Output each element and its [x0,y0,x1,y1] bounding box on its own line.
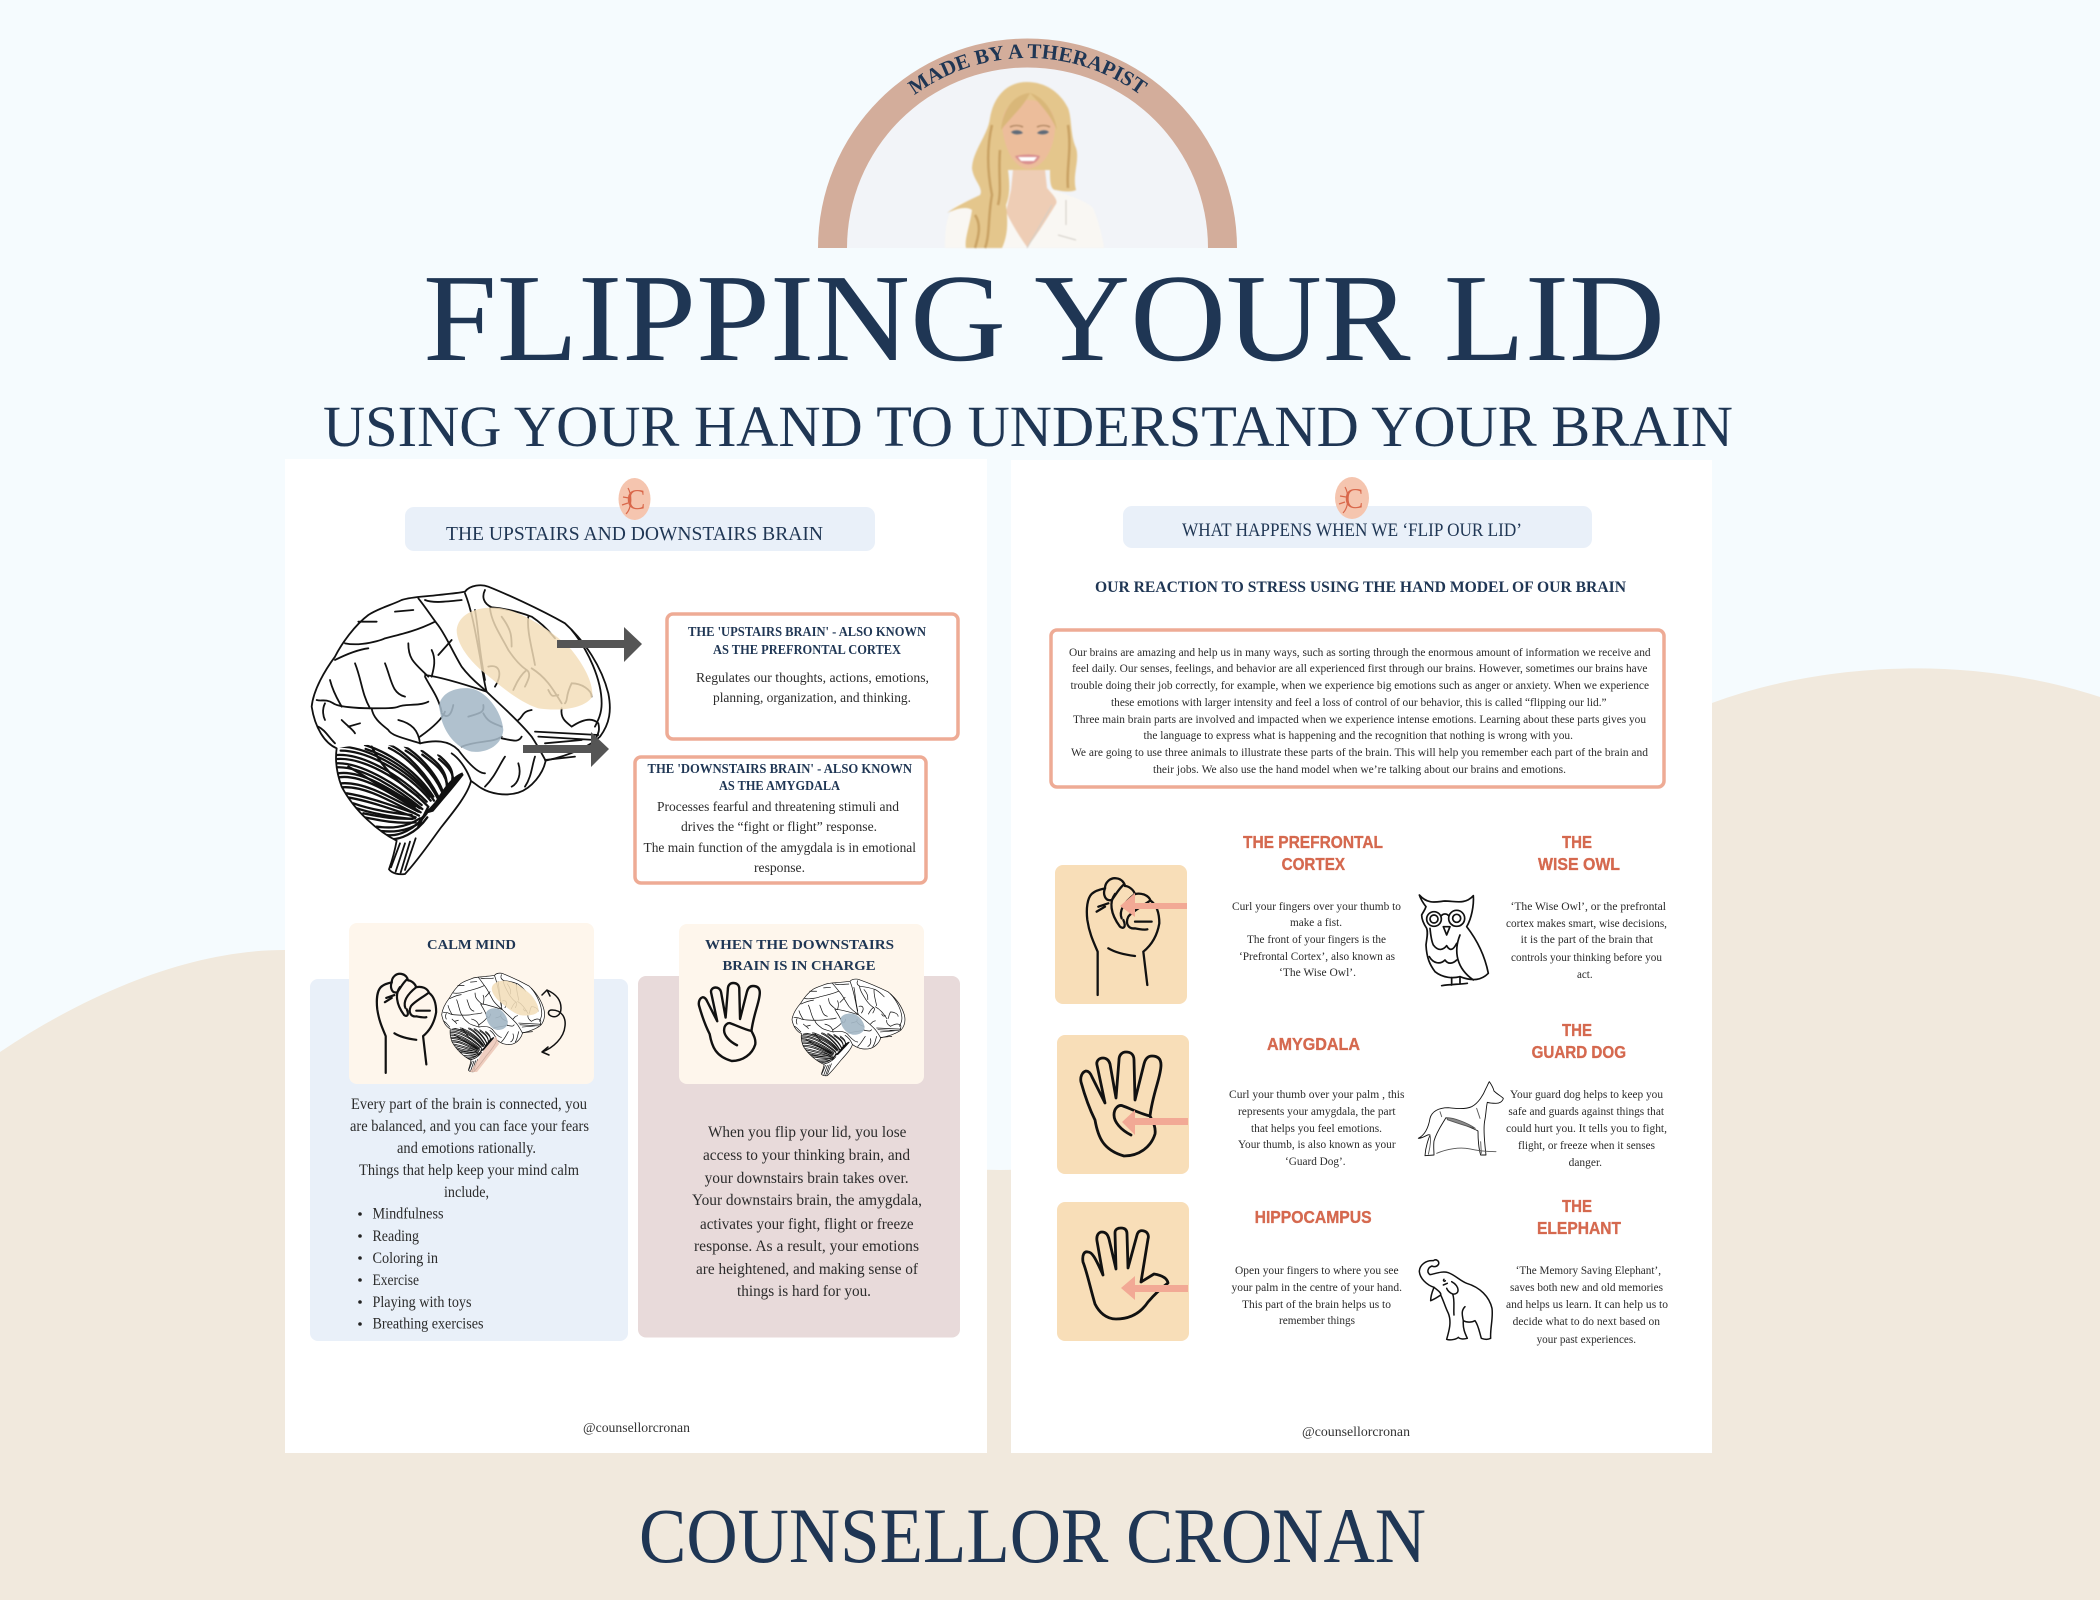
callout: upstairs brain: Regulates our thoughts, actions, emotions, [696,671,929,686]
tile: fist hand model [1055,865,1187,1004]
arch text: MADE BY A THERAPIST [907,44,1148,95]
list: calming activities: Exercise [372,1272,419,1289]
section: wise owl: controls your thinking before you [1511,952,1662,964]
text: calm mind description: include, [444,1184,489,1201]
section: amygdala: ‘Guard Dog’. [1285,1156,1346,1168]
tile: open palm hand model [1057,1202,1189,1341]
section: guard dog: Your guard dog helps to keep you [1510,1089,1663,1101]
panel: upstairs and downstairs brain [285,459,987,1453]
arrow: to downstairs brain [523,732,609,767]
callout: introduction: We are going to use three animals to illustrate these parts of the brain. This will help you remember each part of the brain and [1071,747,1648,759]
text: downstairs brain description: your downstairs brain takes over. [705,1170,909,1187]
text: calm mind description: Every part of the brain is connected, you [351,1096,587,1113]
text: calm mind description: are balanced, and you can face your fears [350,1118,589,1135]
icon: fist [377,974,436,1073]
callout: introduction: these emotions with larger intensity and feel a loss of control of our behavior, this is called “flipping our lid.” [1111,697,1607,709]
heading pill: THE UPSTAIRS AND DOWNSTAIRS BRAIN [446,523,823,545]
list: calming activities: Mindfulness [372,1206,444,1223]
callout: introduction: their jobs. We also use the hand model when we’re talking about our brains and emotions. [1153,764,1566,776]
card: downstairs brain in charge: WHEN THE DOWNSTAIRS [705,937,894,952]
section: hippocampus: HIPPOCAMPUS [1255,1207,1372,1227]
text: downstairs brain description: response. As a result, your emotions [694,1238,919,1255]
icon: hand with curled thumb [699,983,760,1061]
section: prefrontal cortex: CORTEX [1282,854,1345,874]
card: calm mind: CALM MIND [427,937,516,952]
logo badge: C [627,485,645,516]
section: wise owl [1419,832,1667,986]
section: amygdala: that helps you feel emotions. [1251,1123,1382,1135]
heading pill [405,507,875,551]
text: downstairs brain description: activates your fight, flight or freeze [700,1216,914,1233]
card: calm mind [310,923,628,1341]
card: downstairs brain in charge [638,924,960,1338]
icon: dog [1418,1082,1503,1156]
section: prefrontal cortex: make a fist. [1290,917,1342,929]
text: downstairs brain description: When you flip your lid, you lose [708,1124,907,1141]
text: calm mind description [350,1096,589,1201]
callout: upstairs brain [667,614,958,739]
callout: downstairs brain: drives the “fight or flight” response. [681,820,877,835]
section: guard dog [1418,1020,1667,1169]
handle: @counsellorcronan [1302,1425,1410,1440]
section: amygdala: Your thumb, is also known as your [1238,1139,1396,1151]
section: amygdala: Curl your thumb over your palm , this [1229,1089,1405,1101]
section: prefrontal cortex: ‘The Wise Owl’. [1279,967,1356,979]
logo badge [618,478,650,520]
section: hippocampus [1232,1207,1402,1327]
section: guard dog: safe and guards against things that [1508,1106,1665,1118]
brain diagram [312,585,610,874]
section: elephant: THE [1562,1196,1592,1216]
tile: curled thumb hand model [1057,1035,1189,1174]
callout: upstairs brain: THE 'UPSTAIRS BRAIN' - ALSO KNOWN [688,624,926,639]
callout: introduction [1051,630,1664,787]
icon: calm brain [442,973,545,1072]
text: calm mind description: and emotions rationally. [397,1140,536,1157]
icon: flipped brain [792,979,905,1076]
title: FLIPPING YOUR LID [423,250,1665,388]
subtitle: USING YOUR HAND TO UNDERSTAND YOUR BRAIN [323,394,1733,459]
logo badge [1335,477,1369,519]
handle: @counsellorcronan [583,1421,690,1436]
section: guard dog: GUARD DOG [1532,1042,1626,1062]
section: wise owl: WISE OWL [1538,854,1620,874]
section: amygdala [1229,1034,1405,1168]
callout: downstairs brain: AS THE AMYGDALA [719,778,840,793]
panel: what happens when we flip our lid [1011,460,1712,1453]
callout: introduction: feel daily. Our senses, feelings, and behavior are all experienced first through our brains. However, sometimes our brains have [1072,663,1648,675]
subheading: OUR REACTION TO STRESS USING THE HAND MODEL OF OUR BRAIN [1095,579,1626,596]
text: downstairs brain description [692,1124,922,1300]
section: elephant: ELEPHANT [1537,1218,1621,1238]
arrow: to upstairs brain [557,627,642,662]
section: elephant: and helps us learn. It can help us to [1506,1299,1668,1311]
callout: downstairs brain: The main function of the amygdala is in emotional [644,841,916,856]
heading pill [1123,506,1592,548]
text: downstairs brain description: things is hard for you. [737,1283,871,1300]
section: hippocampus: your palm in the centre of your hand. [1232,1282,1402,1294]
section: prefrontal cortex: THE PREFRONTAL [1243,832,1383,852]
text: downstairs brain description: are heightened, and making sense of [696,1261,919,1278]
section: wise owl: cortex makes smart, wise decisions, [1506,918,1667,930]
icon: elephant [1419,1260,1492,1340]
section: wise owl: it is the part of the brain that [1521,934,1654,946]
section: wise owl: ‘The Wise Owl’, or the prefrontal [1510,901,1666,913]
section: amygdala: represents your amygdala, the part [1238,1106,1396,1118]
icon: owl [1419,895,1488,986]
text: downstairs brain description: Your downstairs brain, the amygdala, [692,1192,922,1209]
section: elephant: saves both new and old memories [1510,1282,1664,1294]
section: hippocampus: Open your fingers to where you see [1235,1265,1399,1277]
callout: downstairs brain [635,757,926,883]
icon: circular arrows [542,990,565,1055]
section: guard dog: flight, or freeze when it senses [1518,1140,1656,1152]
section: guard dog: could hurt you. It tells you to fight, [1506,1123,1667,1135]
section: guard dog: THE [1562,1020,1592,1040]
section: elephant: your past experiences. [1537,1334,1636,1346]
callout: downstairs brain: response. [754,861,805,876]
list: calming activities: Reading [372,1228,419,1245]
section: wise owl: THE [1562,832,1592,852]
logo badge: C [1345,484,1363,515]
background wave [0,668,2100,1600]
card: downstairs brain in charge: BRAIN IS IN CHARGE [722,958,876,973]
section: hippocampus: This part of the brain helps us to [1242,1299,1391,1311]
section: elephant [1419,1196,1668,1346]
callout: upstairs brain: AS THE PREFRONTAL CORTEX [713,642,901,657]
section: guard dog: danger. [1569,1157,1602,1169]
section: prefrontal cortex: ‘Prefrontal Cortex’, also known as [1239,951,1396,963]
list: calming activities: Playing with toys [372,1294,472,1311]
section: elephant: decide what to do next based on [1513,1316,1660,1328]
section: prefrontal cortex: The front of your fingers is the [1247,934,1386,946]
list: calming activities [358,1206,484,1333]
section: wise owl: act. [1577,969,1593,981]
section: elephant: ‘The Memory Saving Elephant’, [1516,1265,1661,1277]
list: calming activities: Coloring in [372,1250,438,1267]
callout: downstairs brain: THE 'DOWNSTAIRS BRAIN' - ALSO KNOWN [648,761,912,776]
heading pill: WHAT HAPPENS WHEN WE ‘FLIP OUR LID’ [1182,521,1522,541]
section: prefrontal cortex [1232,832,1401,979]
callout: upstairs brain: planning, organization, and thinking. [713,691,911,706]
text: calm mind description: Things that help keep your mind calm [359,1162,579,1179]
callout: introduction: the language to express what is happening and the recognition that nothing is wrong with you. [1144,730,1573,742]
photo: therapist portrait [945,82,1104,248]
section: hippocampus: remember things [1279,1315,1356,1327]
therapist arch badge [818,38,1237,250]
callout: introduction: trouble doing their job correctly, for example, when we experience big emotions such as anger or anxiety. When we experience [1070,680,1649,692]
callout: introduction: Our brains are amazing and help us in many ways, such as sorting through the enormous amount of information we receive and [1069,647,1651,659]
section: prefrontal cortex: Curl your fingers over your thumb to [1232,901,1401,913]
list: calming activities: Breathing exercises [372,1316,484,1333]
callout: introduction: Three main brain parts are involved and impacted when we experience intense emotions. Learning about these parts gives you [1073,714,1646,726]
text: downstairs brain description: access to your thinking brain, and [703,1147,910,1164]
brand name: COUNSELLOR CRONAN [639,1492,1426,1579]
callout: downstairs brain: Processes fearful and threatening stimuli and [657,800,899,815]
section: amygdala: AMYGDALA [1267,1034,1360,1054]
